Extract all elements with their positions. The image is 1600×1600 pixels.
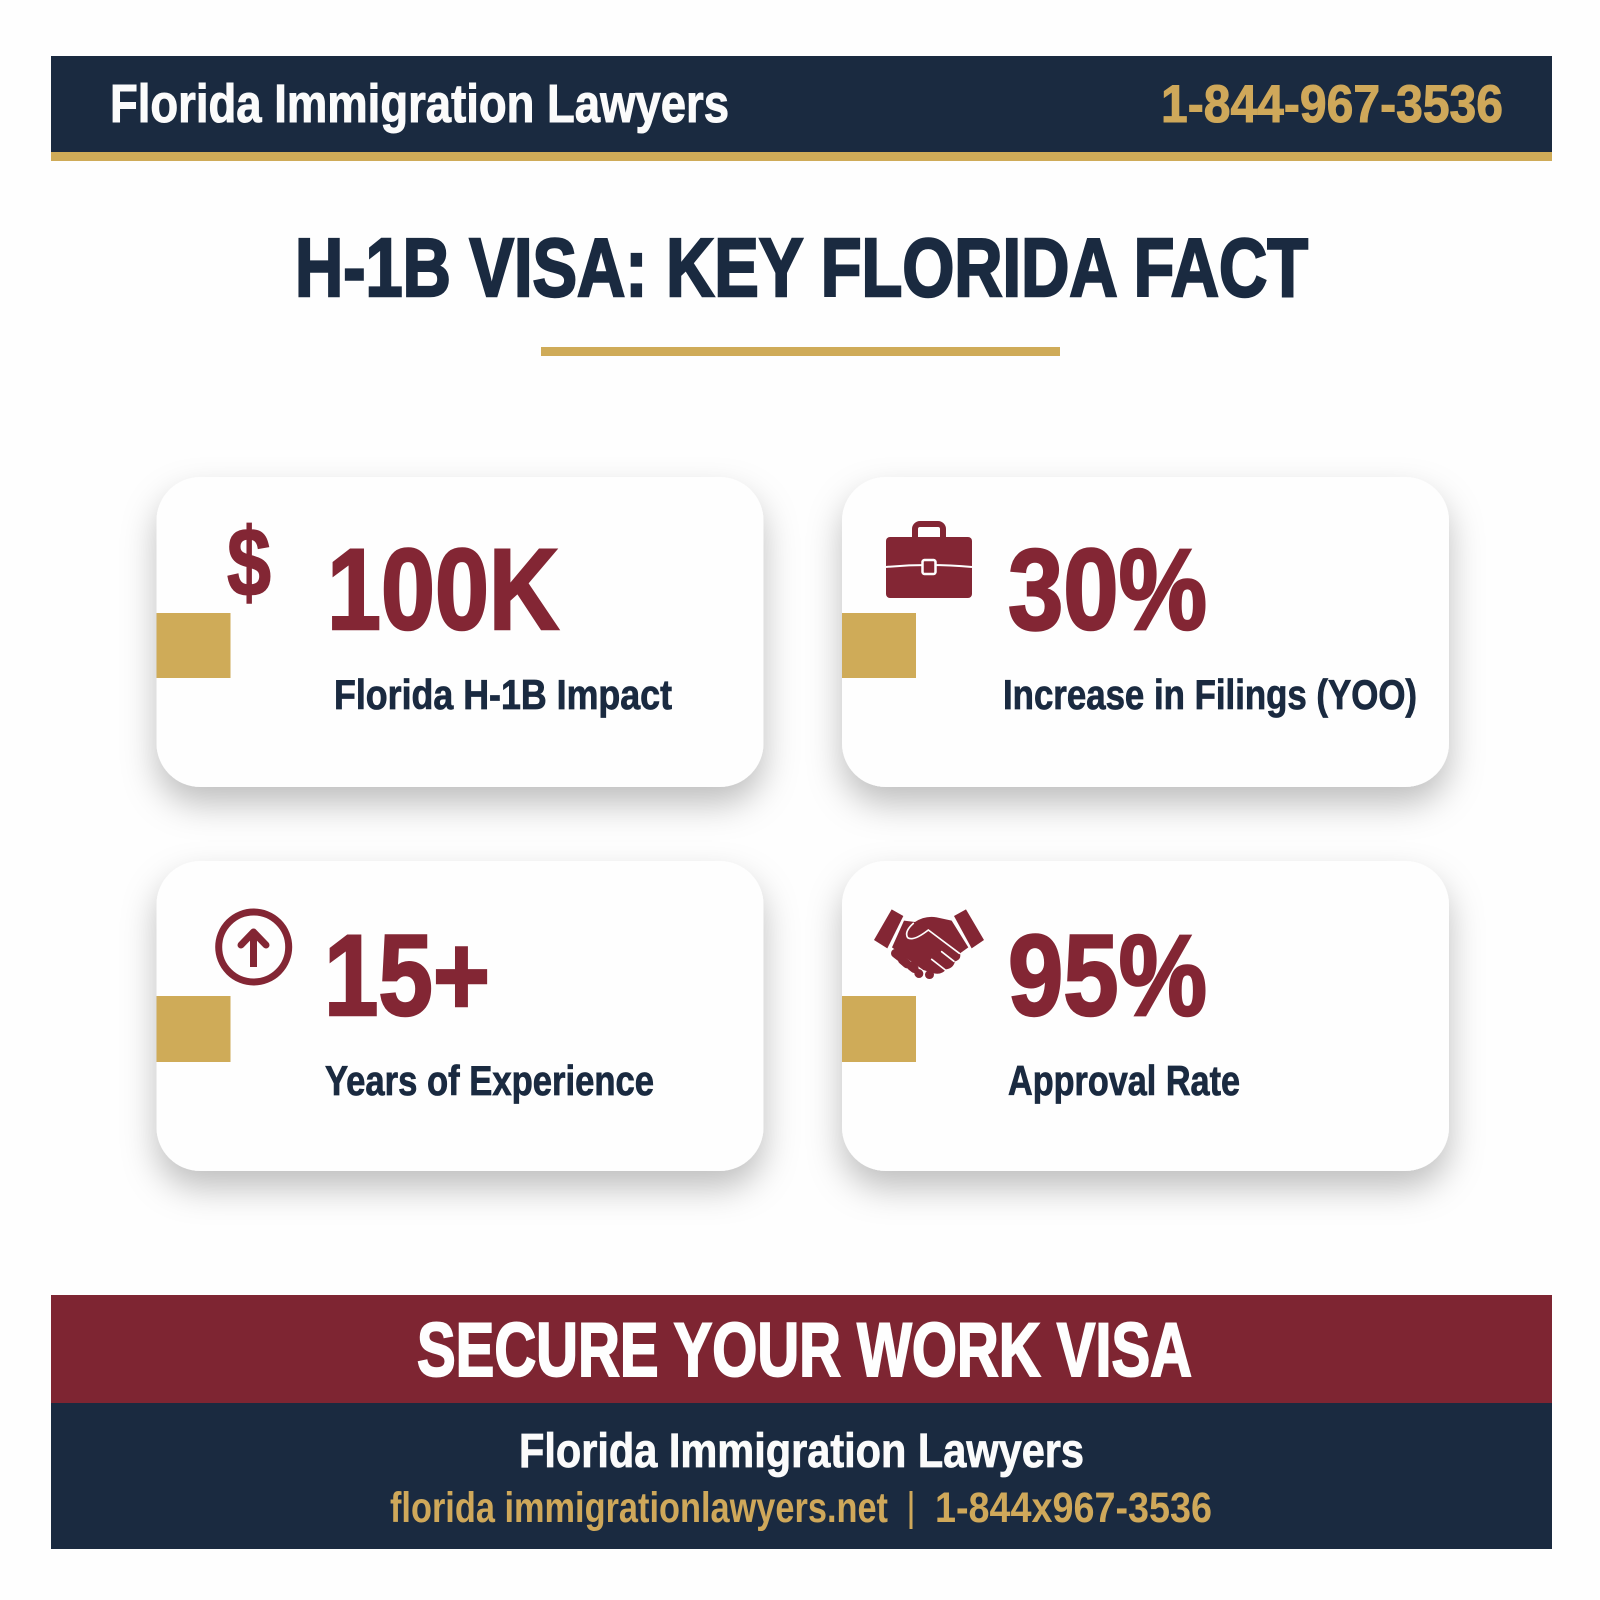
stat: 95%: 95%	[1008, 912, 1207, 1040]
panel: increase in filings	[842, 477, 1449, 787]
call to action text: SECURE YOUR WORK VISA	[417, 1308, 1192, 1393]
header bar	[51, 56, 1552, 161]
panel: approval rate	[842, 861, 1449, 1171]
footer firm name: Florida Immigration Lawyers	[519, 1425, 1084, 1478]
panel: years of experience	[156, 861, 764, 1171]
title: H-1B VISA: KEY FLORIDA FACT	[295, 221, 1308, 314]
icon: briefcase	[886, 524, 972, 598]
call to action banner	[51, 1295, 1552, 1403]
icon: handshake	[874, 909, 984, 975]
label: Years of Experience: Years of Experience	[325, 1057, 654, 1104]
stat: 100K: 100K	[327, 526, 559, 654]
footer website and phone: 1-844x967-3536	[935, 1484, 1212, 1532]
label: Increase in Filings (YOO): Increase in Filings (YOO)	[1003, 671, 1417, 718]
footer panel	[51, 1403, 1552, 1549]
stat: 30%: 30%	[1008, 526, 1207, 654]
label: Florida H-1B Impact: Florida H-1B Impact	[334, 671, 672, 718]
footer website and phone: florida immigrationlawyers.net	[390, 1484, 888, 1532]
title underline	[541, 347, 1060, 356]
header firm name: Florida Immigration Lawyers	[110, 74, 729, 134]
label: Approval Rate: Approval Rate	[1008, 1057, 1240, 1104]
stat: 15+: 15+	[324, 912, 490, 1040]
header phone number: 1-844-967-3536	[1161, 75, 1503, 134]
icon: up arrow in circle	[219, 912, 289, 982]
icon: dollar sign: $	[227, 508, 271, 617]
panel: Florida H-1B impact	[156, 477, 764, 787]
